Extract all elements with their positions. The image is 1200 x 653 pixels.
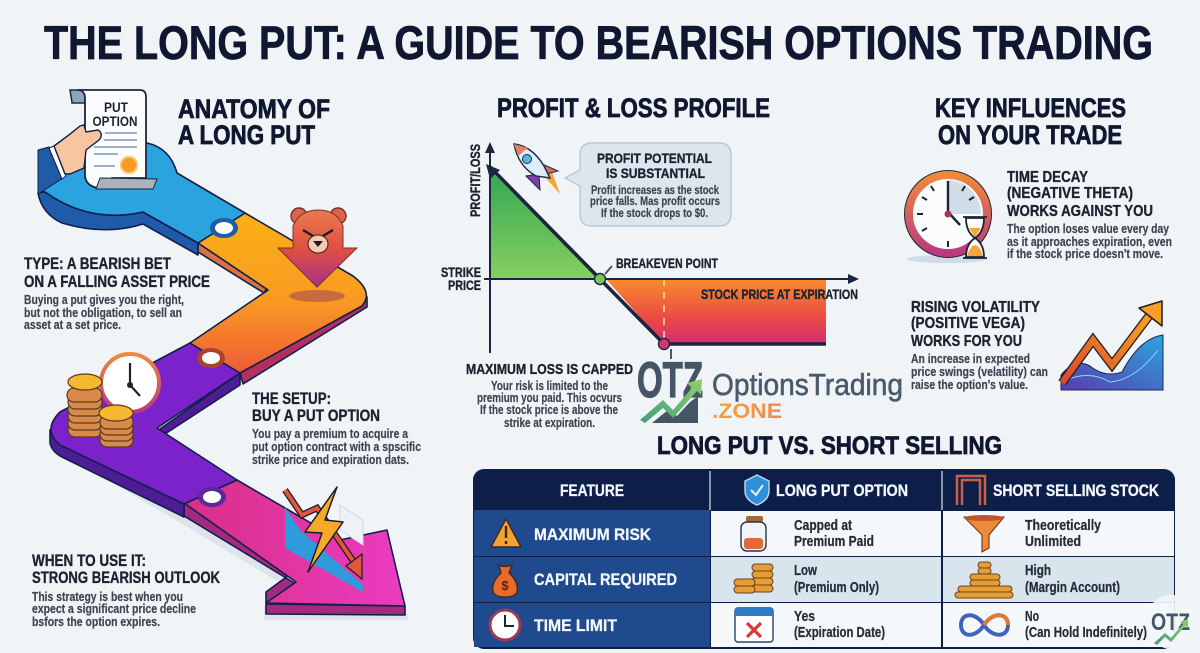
row: capital required: (Premium Only): [794, 580, 879, 596]
text block: the setup: THE SETUP:: [252, 390, 331, 408]
heading: profit and loss: PROFIT & LOSS PROFILE: [497, 93, 770, 123]
text block: rising volatility: RISING VOLATILITY: [911, 299, 1041, 316]
text block: the setup: put option contract with a spscific: [252, 439, 421, 454]
text block: rising volatility: WORKS FOR YOU: [911, 333, 1022, 350]
text block: maximum loss: [466, 361, 633, 430]
row: time limit: TIME LIMIT: [534, 616, 618, 635]
header: long put option: [745, 475, 908, 505]
row: capital required: CAPITAL REQUIRED: [534, 570, 677, 589]
header: short selling stock: SHORT SELLING STOCK: [993, 481, 1160, 500]
heading: anatomy: [178, 94, 330, 150]
text block: time decay: as it approaches expiration, even: [1007, 235, 1172, 249]
text block: rising volatility: [911, 299, 1048, 392]
text block: rising volatility: (POSITIVE VEGA): [911, 315, 1025, 332]
text block: maximum loss: If the stock price is above the: [480, 403, 618, 417]
text block: when to use it: WHEN TO USE IT:: [32, 552, 146, 570]
heading: anatomy: ANATOMY OF: [178, 94, 330, 124]
icon: hand holding put option contract: PUT: [104, 100, 129, 115]
row: capital required: $: [501, 578, 509, 593]
callout: profit potential: [565, 143, 731, 226]
text block: when to use it: bsfors the option expires.: [32, 614, 160, 629]
icon: hand holding put option contract: OPTION: [92, 114, 138, 129]
heading: key influences: [935, 93, 1126, 150]
brand logo: OptionsTrading.Zone: OTZ: [637, 352, 703, 408]
text block: rising volatility: An increase in expected: [911, 352, 1030, 366]
icon: bear down arrow: [278, 208, 357, 302]
orange segment: [190, 213, 367, 384]
row: maximum risk: Premium Paid: [794, 534, 874, 550]
payoff chart: [484, 142, 859, 359]
axis label: strike price: STRIKE: [441, 265, 481, 280]
heading: key influences: KEY INFLUENCES: [935, 93, 1126, 123]
row: capital required: (Margin Account): [1025, 580, 1120, 596]
row: time limit: [490, 608, 1147, 642]
text block: rising volatility: raise the option's value.: [911, 378, 1028, 392]
text block: maximum loss: MAXIMUM LOSS IS CAPPED: [466, 361, 633, 378]
text block: type: but not the obligation, to sell an: [24, 305, 182, 320]
text block: maximum loss: strike at expiration.: [504, 416, 595, 430]
icon: rising volatility chart: [1061, 301, 1163, 390]
text block: maximum loss: Your risk is limited to the: [491, 379, 608, 393]
row: maximum risk: Theoretically: [1025, 518, 1101, 534]
row: maximum risk: Capped at: [794, 518, 852, 534]
icon: coins and clock: [67, 354, 159, 447]
axis label: strike price: [441, 265, 481, 293]
axis label: strike price: PRICE: [448, 278, 481, 293]
callout: profit potential: If the stock drops to $0.: [601, 206, 708, 220]
row: maximum risk: Unlimited: [1025, 534, 1081, 550]
callout: profit potential: PROFIT POTENTIAL: [597, 150, 712, 166]
text block: type: Buying a put gives you the right,: [24, 292, 184, 307]
panel: anatomy of a long put: [24, 90, 421, 629]
header: long put option: LONG PUT OPTION: [776, 481, 908, 500]
row: time limit: (Expiration Date): [794, 625, 885, 641]
winding path: [38, 143, 408, 620]
path node: purple: [198, 487, 226, 507]
row: capital required: [493, 562, 1120, 598]
row: maximum risk: [491, 515, 1101, 552]
heading: key influences: ON YOUR TRADE: [938, 120, 1122, 150]
table frame and rows: [473, 469, 1175, 649]
row: time limit: No: [1025, 609, 1039, 625]
axis label: stock price at expiration: STOCK PRICE AT EXPIRATION: [701, 287, 858, 302]
text block: when to use it: STRONG BEARISH OUTLOOK: [32, 569, 220, 587]
row: capital required: Low: [794, 563, 818, 579]
heading: anatomy: A LONG PUT: [178, 120, 315, 150]
icon: lightning bolt crash chart: [285, 487, 363, 592]
text block: time decay: (NEGATIVE THETA): [1007, 185, 1133, 202]
text block: time decay: [1007, 169, 1172, 261]
text block: the setup: [252, 390, 421, 467]
heading: long put vs short selling: LONG PUT VS. SHORT SELLING: [657, 432, 1002, 460]
axis label: profit/loss: PROFIT/LOSS: [468, 144, 483, 217]
text block: type: [24, 255, 210, 332]
icon: hand holding put option contract: [38, 90, 157, 194]
icon: clock with hourglass: [904, 170, 992, 263]
text block: time decay: The option loses value every day: [1007, 222, 1169, 236]
text block: when to use it: [32, 552, 220, 629]
row: time limit: (Can Hold Indefinitely): [1025, 625, 1147, 641]
panel: key influences: [904, 93, 1172, 392]
text block: time decay: if the stock price doesn't move.: [1007, 247, 1163, 261]
text block: the setup: BUY A PUT OPTION: [252, 407, 380, 425]
text block: time decay: WORKS AGAINST YOU: [1007, 203, 1153, 220]
purple segment: [50, 343, 240, 517]
header: feature: FEATURE: [560, 481, 624, 500]
text block: when to use it: expect a significant price decline: [32, 601, 196, 616]
path node: orange: [197, 348, 225, 368]
text block: type: ON A FALLING ASSET PRICE: [24, 273, 210, 291]
header: short selling stock: [957, 476, 1160, 505]
text block: type: asset at a set price.: [24, 317, 121, 332]
brand logo: OptionsTrading.Zone: [637, 352, 903, 423]
panel: profit and loss profile: [441, 93, 859, 430]
text block: the setup: strike price and expiration dats.: [252, 452, 409, 467]
row: time limit: Yes: [794, 609, 815, 625]
icon: rocket: [514, 144, 560, 194]
brand logo: OptionsTrading.Zone: OptionsTrading: [712, 367, 903, 402]
text block: rising volatility: price swings (velatility) can: [911, 365, 1048, 379]
magenta arrow segment: [184, 480, 405, 615]
brand logo: OptionsTrading.Zone: .ZONE: [712, 400, 782, 423]
text block: maximum loss: premium you paid. This ocvurs: [477, 391, 622, 405]
callout: profit potential: Profit increases as the stock: [591, 183, 719, 197]
text block: type: TYPE: A BEARISH BET: [24, 255, 171, 273]
blue segment: [38, 143, 245, 255]
row: maximum risk: MAXIMUM RISK: [534, 525, 652, 544]
watermark badge: OTZ: [1151, 609, 1190, 636]
callout: profit potential: IS SUBSTANTIAL: [606, 165, 705, 181]
text block: the setup: You pay a premium to acquire a: [252, 426, 409, 441]
path node: blue: [210, 218, 238, 238]
callout: profit potential: price falls. Mas profit occurs: [590, 194, 720, 208]
watermark badge: [1145, 595, 1199, 649]
text block: when to use it: This strategy is best when you: [32, 589, 183, 604]
comparison table: [473, 469, 1175, 649]
text block: time decay: TIME DECAY: [1007, 169, 1089, 186]
label: breakeven point: BREAKEVEN POINT: [616, 256, 719, 271]
row: capital required: High: [1025, 563, 1051, 579]
